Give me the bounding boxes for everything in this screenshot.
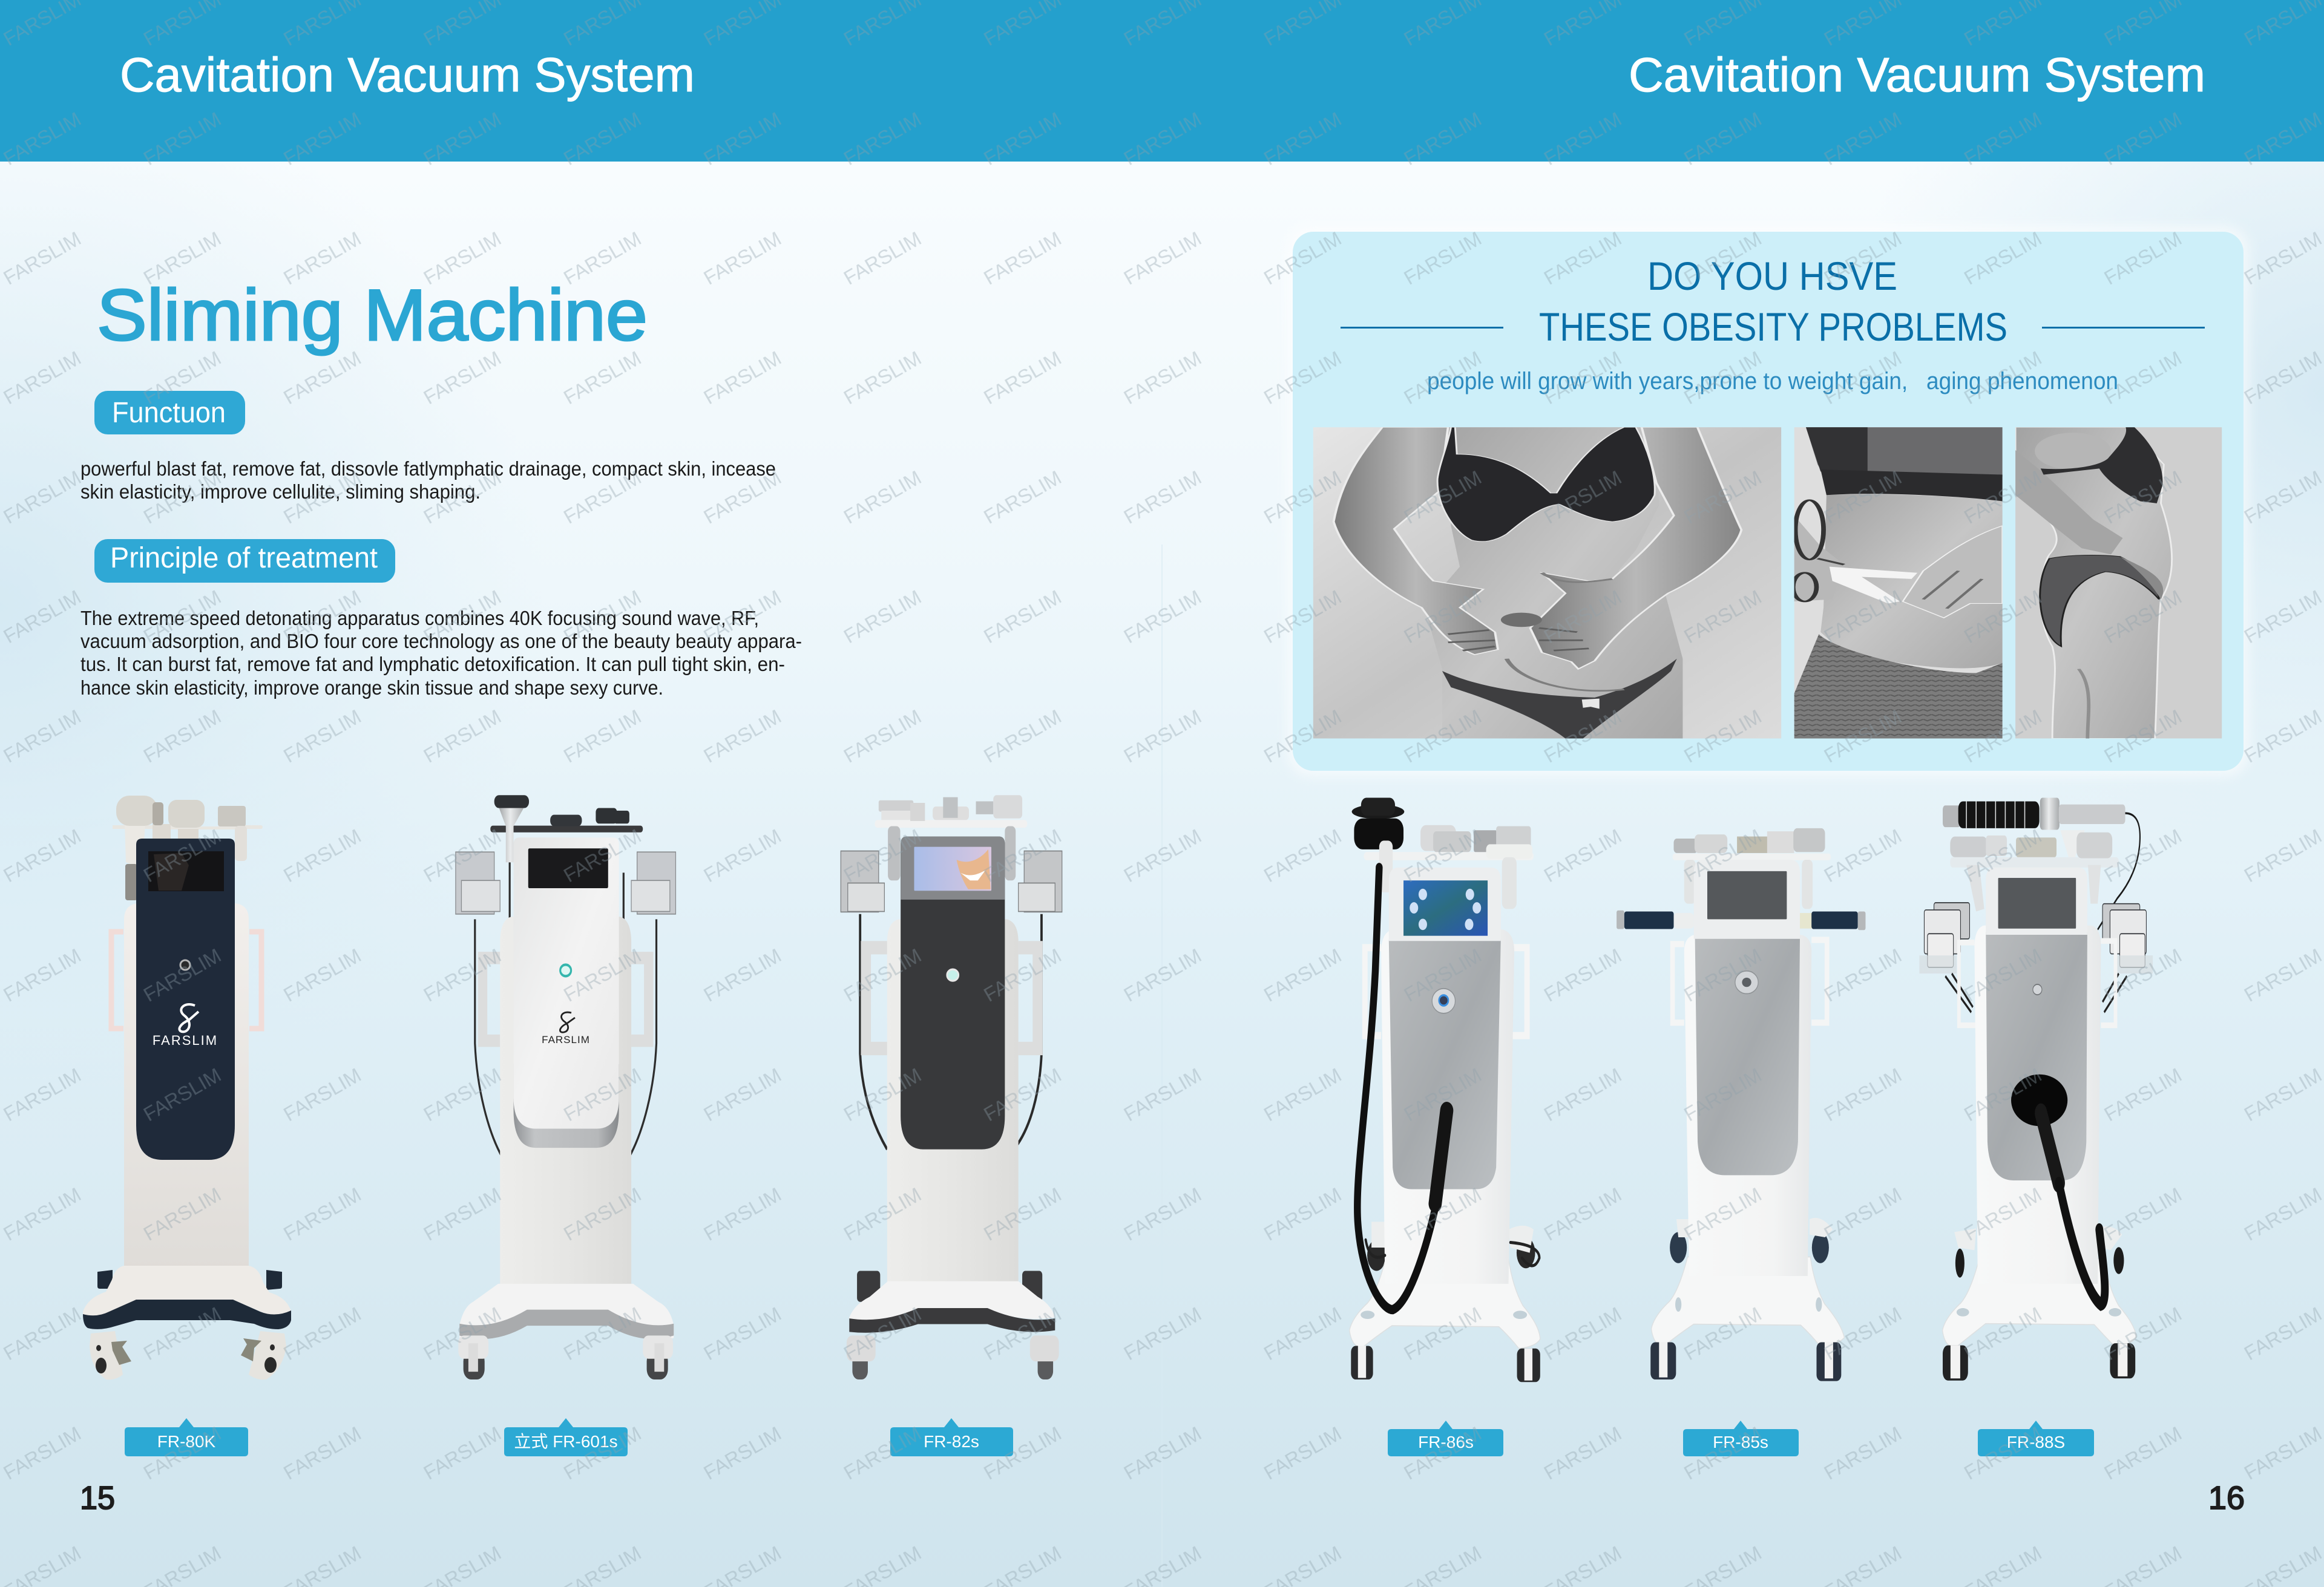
column body [1974, 926, 2101, 1284]
screen [148, 851, 224, 891]
panel: obesity problems [1288, 227, 2248, 776]
wheels [90, 1331, 286, 1379]
handpieces and tray [1364, 825, 1534, 909]
handpieces and tray [1673, 828, 1831, 909]
wheels [847, 1335, 1059, 1379]
panel subtitle: people will grow with years,prone to weight gain, aging phenomenon [1427, 368, 2118, 394]
function text block: skin elasticity, improve cellulite, sliming shaping. [80, 480, 481, 503]
side handles [1959, 941, 2116, 1026]
power button [1432, 989, 1456, 1013]
photo: waist front [1313, 427, 1781, 739]
base [1652, 1257, 1844, 1347]
column body [124, 903, 249, 1274]
wheels [458, 1335, 673, 1379]
principle text block: vacuum adsorption, and BIO four core technology as one of the beauty beauty appara- [80, 630, 802, 652]
front panel [1694, 860, 1800, 1175]
panel lip [514, 1064, 619, 1148]
power button [1735, 971, 1758, 993]
principle text block: tus. It can burst fat, remove fat and lymphatic detoxification. It can pull tight skin, en- [80, 653, 785, 675]
principle text block [80, 607, 802, 699]
tag: FR-82s: FR-82s [924, 1432, 979, 1451]
base [849, 1271, 1055, 1333]
tag: FR-601s [504, 1418, 628, 1456]
logo: FARSLIM [153, 1033, 218, 1048]
vacuum port [2011, 1075, 2067, 1126]
pill: function [94, 391, 245, 434]
handpieces and tray [113, 796, 263, 900]
screen [1403, 880, 1488, 936]
cup head [1352, 797, 1404, 892]
page number 15: 15 [80, 1480, 115, 1516]
cables [475, 862, 657, 1154]
tag: FR-601s: 立式 FR-601s [514, 1432, 618, 1451]
screen [528, 848, 608, 888]
wheels [1943, 1343, 2135, 1381]
pill: principle of treatment [94, 539, 395, 583]
side handles [866, 947, 1038, 1049]
logo [542, 1012, 590, 1045]
handpieces and tray [875, 795, 1027, 880]
rear feet [1954, 1226, 2124, 1278]
roller handpiece [1943, 797, 2140, 929]
side handles [111, 932, 261, 1029]
cable [2041, 1113, 2105, 1304]
power button [180, 960, 190, 970]
machine FR-88S [1919, 797, 2153, 1381]
wheels [1351, 1346, 1540, 1382]
pill: function: Functuon [112, 397, 226, 429]
function text block: powerful blast fat, remove fat, dissovle fatlymphatic drainage, compact skin, incease [80, 457, 776, 480]
screen [1998, 878, 2076, 929]
photo: pinching waist with scissors [1793, 427, 2003, 739]
power button [2033, 984, 2042, 995]
header title left: Cavitation Vacuum System [120, 48, 695, 102]
base [459, 1284, 674, 1340]
tag: FR-85s [1683, 1421, 1799, 1456]
logo: FARSLIM [542, 1034, 590, 1045]
power button [947, 969, 959, 981]
handpieces and tray [490, 795, 643, 862]
tag: FR-86s [1388, 1421, 1503, 1456]
panel heading: DO YOU HSVE [1647, 254, 1897, 298]
cables [860, 914, 1042, 1150]
base [1943, 1258, 2136, 1347]
screen [914, 847, 991, 891]
side bars [1617, 911, 1865, 930]
photos [1313, 427, 2222, 739]
page number 16: 16 [2208, 1480, 2245, 1516]
side handles [1365, 947, 1527, 1036]
machine FR-80K [83, 796, 291, 1379]
screen bezel [901, 837, 1005, 900]
machine FR-85s [1617, 828, 1865, 1381]
front panel [1389, 868, 1501, 1189]
photo: side waist and hip [2015, 427, 2222, 739]
front panel [901, 837, 1005, 1150]
column body [887, 919, 1019, 1286]
wheels [1650, 1342, 1841, 1381]
logo [153, 1004, 218, 1048]
tag: FR-85s: FR-85s [1713, 1433, 1768, 1451]
tag: FR-80K: FR-80K [157, 1432, 216, 1451]
tag: FR-88S [1978, 1421, 2094, 1456]
tag: FR-80K [125, 1418, 248, 1456]
panel heading [1539, 254, 2007, 349]
rear feet [1367, 1222, 1535, 1271]
tag: FR-82s [890, 1418, 1013, 1456]
front panel [1986, 868, 2087, 1180]
side handles [483, 958, 649, 1041]
handpieces and tray [1950, 830, 2119, 911]
pill: principle of treatment: Principle of treatment [110, 542, 378, 574]
front panel [136, 839, 235, 1160]
side pads [1919, 903, 2153, 1012]
principle text block: hance skin elasticity, improve orange skin tissue and shape sexy curve. [80, 676, 663, 699]
power button [560, 965, 571, 976]
machine FR-82s [841, 795, 1062, 1379]
panel heading: THESE OBESITY PROBLEMS [1539, 304, 2007, 349]
function text block [80, 457, 776, 503]
principle text block: The extreme speed detonating apparatus combines 40K focusing sound wave, RF, [80, 607, 759, 629]
column body [500, 917, 631, 1292]
header band [0, 0, 2324, 162]
base [1350, 1258, 1540, 1349]
machine FR-601s [456, 795, 675, 1379]
tag: FR-86s: FR-86s [1418, 1433, 1474, 1451]
rear feet [1670, 1218, 1833, 1263]
header title right: Cavitation Vacuum System [1629, 48, 2205, 102]
side pads [456, 852, 675, 914]
screen [1707, 871, 1787, 919]
main heading: Sliming Machine [97, 275, 648, 356]
cables [1357, 868, 1540, 1310]
side pads [841, 851, 1062, 912]
base [83, 1266, 291, 1329]
tag: FR-88S: FR-88S [2007, 1433, 2065, 1451]
machine FR-86s [1350, 797, 1540, 1382]
side handles [1673, 940, 1827, 1023]
column body [1684, 935, 1811, 1276]
column body [1381, 929, 1514, 1284]
front panel [514, 837, 619, 1128]
